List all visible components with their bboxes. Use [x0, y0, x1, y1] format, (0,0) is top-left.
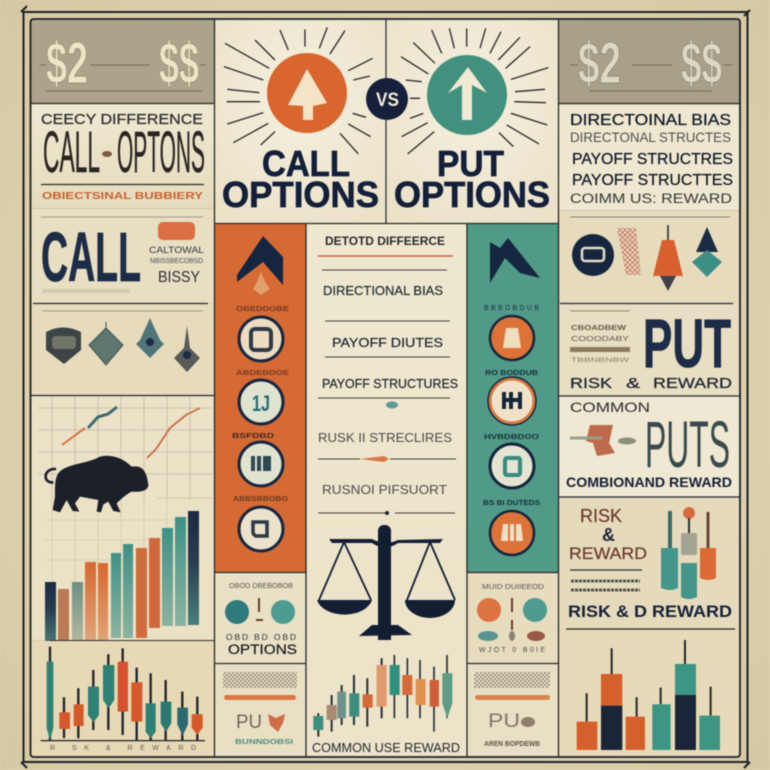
panel: left big call: NBISSBECOBSD [150, 258, 203, 265]
label: common and reward: COMBIONAND REWARD [566, 474, 732, 490]
mark: orange slider [360, 456, 389, 462]
big call word: CALL [41, 218, 141, 296]
line: payoff structures repeat: PAYOFF STRUCTTES [572, 172, 733, 189]
label: ampersand: & [602, 525, 615, 545]
risk and reward line: & [626, 375, 640, 392]
heading: key difference: CEECY DIFFERENCE [41, 111, 203, 128]
divider: centre vs line [385, 19, 387, 223]
row: risk structures: RUSK II STRECLIRES [318, 430, 452, 445]
panel: centre header call option [215, 19, 386, 223]
caption three: BSFDBD [232, 433, 274, 440]
small stacked captions: CBOADBEW [571, 325, 627, 332]
icon: navy teal kite [692, 227, 722, 277]
panel: centre header put option [386, 19, 558, 223]
icon: hatched diamond [617, 228, 641, 275]
orange strip [475, 695, 550, 700]
mark: orange [268, 714, 285, 732]
icon: orange circle arrow [267, 53, 347, 133]
icon: bull [46, 456, 148, 512]
panel: right big put [559, 304, 740, 396]
icon: circle three [490, 444, 534, 488]
label: risk: RISK [580, 506, 622, 526]
caption two: ABDEBDOE [236, 370, 289, 377]
small caption: WJOT 0 B0IE [479, 647, 545, 654]
caption one: OBEDDOBE [236, 306, 289, 313]
risk and reward line: REWARD [653, 375, 732, 392]
line: payoff structures: PAYOFF STRUCTRES [572, 151, 733, 168]
icon: circle two [239, 380, 283, 424]
title: call options [222, 143, 379, 215]
small stacked captions [570, 325, 630, 364]
icon: circle two [488, 377, 536, 425]
label: risk and reward: RISK & D REWARD [568, 603, 732, 621]
title: put options [394, 143, 550, 215]
label pu: PU [488, 711, 520, 732]
line: directional structures: DIRECTONAL STRUCTES [570, 129, 731, 145]
heading: key difference: DETOTD DIFFEERCE [325, 236, 445, 248]
small stacked captions: TBBNBNBW [571, 358, 630, 364]
small caption: AREN BOPDEWB [484, 741, 540, 748]
icon: chevron [490, 238, 540, 283]
caption four: ABBSBBOBG [233, 496, 289, 503]
icon: circle one [239, 317, 283, 361]
title: call options: CALL [262, 143, 350, 184]
dollar amounts right: $$ [681, 31, 722, 96]
icon: teal pair [225, 598, 295, 624]
text: OPTONS [117, 120, 205, 185]
hatched strip [474, 672, 550, 688]
panel: lower call options card [215, 573, 306, 663]
small labels: OBD BD OBD [226, 632, 296, 642]
rays: put sunburst [401, 28, 548, 154]
mark [521, 717, 535, 727]
dollar amounts right: $2 [578, 31, 621, 96]
icon: chevron [237, 236, 283, 285]
panel: teal put column [467, 224, 558, 572]
caption two: RO BODDUB [485, 370, 538, 377]
orange mark [158, 222, 195, 240]
icon: badge two [89, 322, 123, 365]
dollar amounts right [578, 31, 722, 96]
caption three: HVBDBDOO [484, 434, 540, 441]
badge: vs [366, 78, 408, 120]
panel: line chart grid [31, 396, 214, 500]
risk and reward line: RISK [570, 375, 612, 392]
icon: circle four [490, 511, 534, 555]
title: put options: OPTIONS [394, 174, 550, 215]
panel: centre comparison list [306, 224, 467, 638]
subheading: directional bias: OBIECTSINAL BUBBIERY [42, 190, 203, 202]
icon: navy coin [572, 234, 614, 276]
panel: common puts [559, 396, 740, 497]
panel: left big call [31, 208, 214, 303]
panel: right top money banner [559, 19, 740, 103]
rays: call sunburst [224, 27, 373, 154]
bar chart: lower right [559, 630, 740, 757]
icon: badge one [46, 328, 81, 364]
small ovals [478, 631, 545, 641]
caption: common use reward: COMMON USE REWARD [312, 741, 460, 755]
title: call options: OPTIONS [222, 174, 379, 215]
panel: right icons row [559, 210, 740, 303]
panel: risk and reward [559, 498, 740, 629]
orange strip [224, 695, 296, 700]
mark: red smudge [570, 425, 636, 456]
icon: orange and teal pair [477, 598, 547, 630]
title: put options: PUT [437, 143, 504, 184]
panel: left icons row [31, 304, 214, 395]
line: orange trend two [147, 408, 200, 458]
caption one: BBBDBDUB [484, 305, 539, 312]
icon: balance scale [317, 525, 455, 640]
row: payoff duties: PAYOFF DIUTES [332, 335, 443, 350]
label: reward: REWARD [569, 544, 647, 563]
heading: call options narrow: CALL [43, 120, 100, 185]
row: directional bias: DIRECTIONAL BIAS [323, 283, 443, 298]
icon: bottles [661, 507, 716, 599]
panel: left big call: BISSY [158, 269, 200, 286]
row: risk support: RUSNOI PIFSUORT [322, 483, 447, 497]
line: directional bias: DIRECTOINAL BIAS [570, 112, 731, 129]
label pu: PU [236, 712, 262, 733]
row: payoff structures: PAYOFF STRUCTURES [322, 376, 458, 391]
small heading: MUID DUIIEEOD [482, 584, 544, 591]
small teal text: BUNNDOBSI [235, 739, 293, 746]
hatched strip [223, 672, 297, 688]
small captions: CALTOWAL [149, 245, 204, 255]
caption four: BS BI DUTEDS [483, 500, 540, 507]
icon: circle two: 1J [252, 391, 270, 416]
icon: orange bell [653, 225, 683, 291]
risk and reward line [570, 375, 732, 392]
panel: lower put card left [215, 664, 306, 757]
icon: teal circle arrow [427, 55, 507, 135]
panel: orange call column [215, 224, 306, 572]
dollar amounts left: $2 [46, 31, 88, 96]
icon: bell kite [174, 326, 200, 372]
panel: left call options heading [31, 104, 214, 208]
dollar amounts left: $$ [159, 31, 199, 96]
axis caption: R SK & REWARD [50, 745, 196, 752]
mark: small teal [386, 402, 398, 408]
candlestick chart: centre [313, 655, 452, 737]
bar chart: rising bars [31, 500, 214, 645]
small heading: OBOD DBEBOBOB [229, 583, 293, 590]
line: common reward: COIMM US: REWARD [570, 191, 732, 206]
panel: left top money banner [30, 19, 214, 103]
icon: arrow kite [136, 318, 164, 358]
small stacked captions: COOODABY [571, 336, 629, 343]
panel: lower put card right [467, 664, 558, 757]
panel: right directional text [559, 105, 740, 210]
icon: circle one [490, 316, 534, 360]
candlestick chart: lower left [31, 641, 214, 757]
label: common: COMMON [570, 399, 650, 415]
panel: lower call options card right [467, 573, 558, 663]
line: teal trend [88, 407, 117, 428]
icon: circle four [239, 507, 283, 551]
panel: centre candle area [306, 637, 467, 757]
icon: circle three [239, 442, 283, 486]
options label: OPTIONS [228, 642, 297, 657]
badge: vs: VS [376, 90, 399, 111]
line: orange trend one [62, 428, 85, 445]
dollar amounts left [46, 31, 199, 96]
